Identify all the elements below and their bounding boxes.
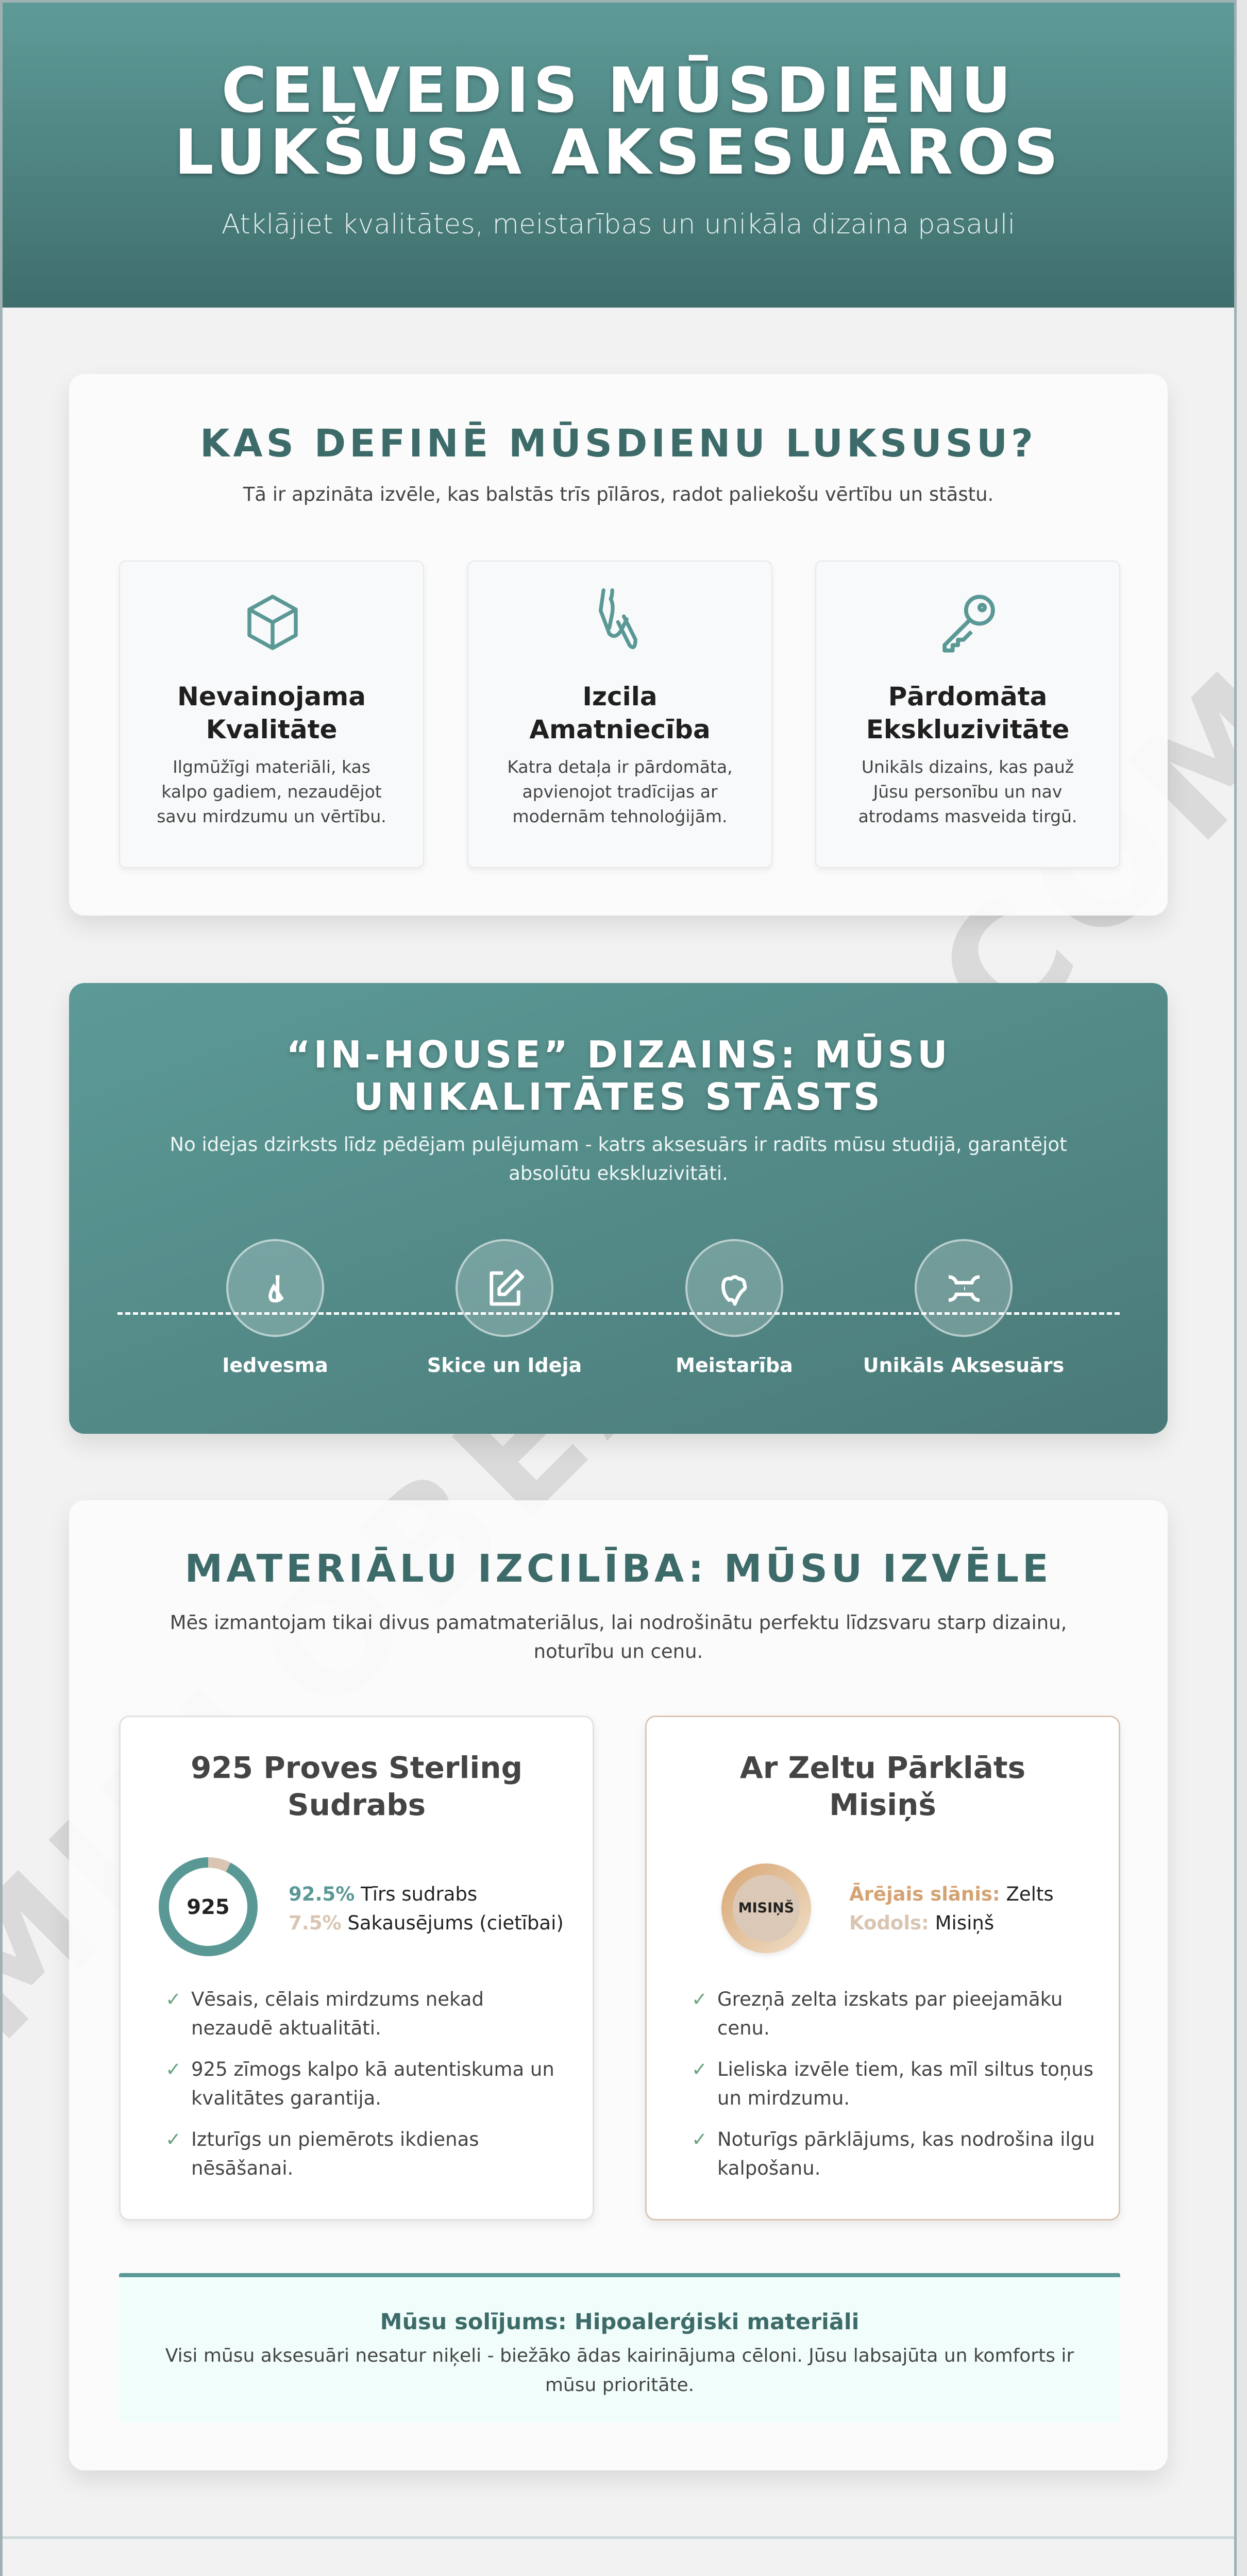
card title [191, 1750, 523, 1822]
legend: 92.5% Tīrs sudrabs [289, 1883, 477, 1905]
step labels: Meistarība [676, 1354, 793, 1377]
donut chart: 925 [187, 1895, 230, 1919]
pillar: exclusivity: Ekskluzivitāte [866, 715, 1069, 744]
donut chart [159, 1857, 258, 1956]
legend: Kodols: Misiņš [849, 1912, 994, 1934]
pillar: craftsmanship: apvienojot tradīcijas ar [522, 782, 718, 802]
benefit list [692, 1988, 1095, 2179]
pillar: quality: savu mirdzumu un vērtību. [157, 806, 386, 826]
benefit list: ✓ [165, 1988, 181, 2010]
footer [3, 2536, 1234, 2576]
pillar: craftsmanship: Katra detaļa ir pārdomāta, [507, 757, 733, 777]
intro text: noturību un cenu. [534, 1640, 703, 1663]
intro text: Mēs izmantojam tikai divus pamatmateriālus, lai nodrošinātu perfektu līdzsvaru starp dizainu, [170, 1612, 1067, 1634]
heading: UNIKALITĀTES STĀSTS [353, 1075, 883, 1118]
description: No idejas dzirksts līdz pēdējam pulējumam - katrs aksesuārs ir radīts mūsu studijā, garantējot absolūtu ekskluzivitāti. [170, 1133, 1067, 1184]
benefit list: Vēsais, cēlais mirdzums nekad nezaudē aktualitāti. [191, 1988, 484, 2039]
callout: hypoallergenic promise [119, 2273, 1120, 2422]
pillar: craftsmanship: Izcila [582, 682, 658, 711]
step labels: Skice un Ideja [427, 1354, 582, 1377]
intro text: Tā ir apzināta izvēle, kas balstās trīs pīlāros, radot paliekošu vērtību un stāstu. [243, 483, 993, 505]
benefit list: ✓ [692, 1988, 707, 2010]
step labels: Unikāls Aksesuārs [863, 1354, 1064, 1377]
legend: 7.5% Sakausējums (cietībai) [289, 1912, 564, 1934]
pillar: quality [119, 561, 424, 868]
benefit list: ✓ [692, 2128, 707, 2150]
callout: hypoallergenic promise: Mūsu solījums: Hipoalerģiski materiāli [380, 2309, 859, 2335]
timeline line [117, 1312, 1120, 1315]
heading [286, 1033, 951, 1118]
legend [849, 1883, 1054, 1934]
benefit list: 925 zīmogs kalpo kā autentiskuma un kvalitātes garantija. [191, 2058, 554, 2109]
benefit list: ✓ [692, 2058, 707, 2080]
heading: MATERIĀLU IZCILĪBA: MŪSU IZVĒLE [184, 1547, 1052, 1591]
callout: hypoallergenic promise: mūsu prioritāte. [545, 2375, 694, 2396]
pillar: exclusivity: Jūsu personību un nav [873, 782, 1062, 802]
title [174, 55, 1063, 189]
legend: Ārējais slānis: Zelts [849, 1883, 1054, 1905]
icon: cube [247, 595, 298, 650]
icon: brass coin: MISIŅŠ [738, 1900, 794, 1916]
pillar: quality: kalpo gadiem, nezaudējot [161, 782, 382, 802]
panel: materials [69, 1500, 1168, 2470]
card: sterling silver [119, 1716, 594, 2221]
icon: hand with tool [599, 588, 637, 649]
heading: KAS DEFINĒ MŪSDIENU LUKSUSU? [200, 421, 1037, 466]
benefit list: Izturīgs un piemērots ikdienas nēsāšanai. [191, 2128, 479, 2179]
card title: Ar Zeltu Pārklāts [740, 1750, 1025, 1785]
subtitle: Atklājiet kvalitātes, meistarības un unikāla dizaina pasauli [222, 209, 1015, 240]
step 2 icon [456, 1239, 553, 1337]
title: LUKŠUSA AKSESUĀROS [174, 117, 1063, 189]
intro text [170, 1612, 1067, 1663]
benefit list: ✓ [165, 2058, 181, 2080]
heading: “IN-HOUSE” DIZAINS: MŪSU [286, 1033, 951, 1076]
pillar: quality: Kvalitāte [206, 715, 337, 744]
step 3 icon [685, 1239, 783, 1337]
benefit list: Lieliska izvēle tiem, kas mīl siltus toņus un mirdzumu. [717, 2058, 1093, 2109]
header [3, 3, 1234, 308]
card title: Sudrabs [288, 1787, 426, 1822]
panel: in-house design [69, 983, 1168, 1434]
legend [289, 1883, 564, 1934]
step 1 icon [226, 1239, 324, 1337]
card title: 925 Proves Sterling [191, 1750, 523, 1785]
panel: what defines luxury [69, 374, 1168, 916]
benefit list: Grezņā zelta izskats par pieejamāku cenu. [717, 1988, 1063, 2039]
benefit list: Noturīgs pārklājums, kas nodrošina ilgu kalpošanu. [717, 2128, 1095, 2179]
pillar: exclusivity: Unikāls dizains, kas pauž [862, 757, 1074, 777]
pillar: craftsmanship: Amatniecība [529, 715, 711, 744]
pillar: quality: Nevainojama [177, 682, 366, 711]
callout: hypoallergenic promise: Visi mūsu aksesuāri nesatur niķeli - biežāko ādas kairinājuma cēloni. Jūsu labsajūta un komforts ir [165, 2345, 1074, 2366]
pillar: craftsmanship [467, 561, 772, 868]
step labels [222, 1354, 1064, 1377]
card title [740, 1750, 1025, 1822]
step labels: Iedvesma [222, 1354, 328, 1377]
pillar: exclusivity: atrodams masveida tirgū. [858, 806, 1077, 826]
pillar: exclusivity: Pārdomāta [888, 682, 1047, 711]
step 4 icon [915, 1239, 1013, 1337]
card: gold plated brass [645, 1716, 1120, 2221]
pillar: quality: Ilgmūžīgi materiāli, kas [173, 757, 370, 777]
benefit list: ✓ [165, 2128, 181, 2150]
pillar: craftsmanship: modernām tehnoloģijām. [512, 806, 728, 826]
icon: brass coin [721, 1863, 811, 1953]
benefit list [165, 1988, 554, 2179]
card title: Misiņš [829, 1787, 936, 1822]
pillar: exclusivity [815, 561, 1120, 868]
title: CELVEDIS MŪSDIENU [222, 55, 1015, 127]
icon: key [942, 595, 995, 652]
